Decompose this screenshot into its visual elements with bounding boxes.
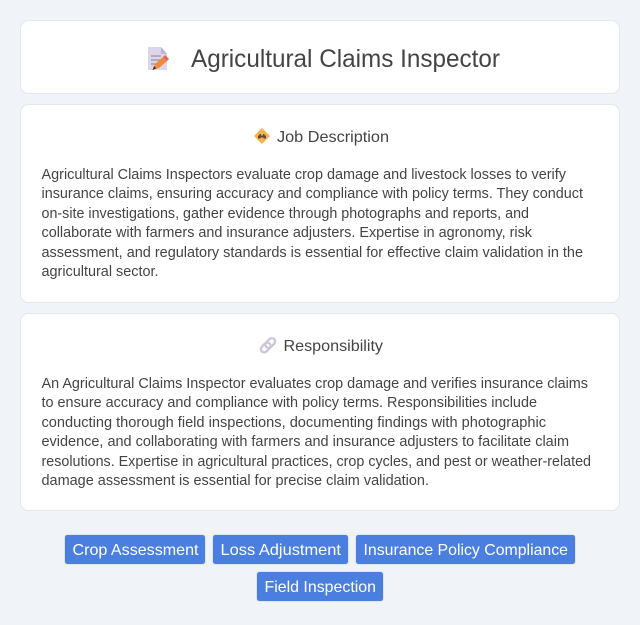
text block: responsibility: to ensure accuracy and compliance with policy terms. Responsibilities include	[42, 395, 537, 411]
tag: crop assessment: Crop Assessment	[72, 542, 199, 559]
text block: responsibility: damage assessment is essential for precise claim validation.	[42, 473, 429, 489]
panel: responsibility	[20, 314, 620, 510]
tag: field inspection	[256, 572, 384, 602]
text block: responsibility: conducting thorough field inspections, documenting findings with photographic	[42, 415, 546, 431]
panel: job description	[20, 104, 620, 302]
text block: job description: insurance claims, ensuring accuracy and compliance with policy terms. They conduct	[42, 186, 583, 202]
tag: insurance policy compliance	[356, 534, 576, 564]
tag: loss adjustment: Loss Adjustment	[220, 542, 342, 559]
tag: field inspection: Field Inspection	[264, 579, 376, 596]
text block: responsibility	[42, 376, 591, 489]
text block: job description: on-site investigations, gather evidence through photographs and reports, and	[42, 206, 529, 222]
text block: job description: collaborate with farmers and insurance adjusters. Expertise in agronomy, risk	[42, 225, 533, 241]
text block: responsibility: An Agricultural Claims Inspector evaluates crop damage and verifies insurance claims	[42, 376, 588, 392]
text block: job description: assessment, and regulatory standards is essential for effective claim validation in the	[42, 245, 583, 261]
icon: link	[260, 337, 276, 354]
text block: responsibility: resolutions. Expertise in agricultural practices, crop cycles, and pest or weather-related	[42, 454, 591, 470]
text block: job description	[42, 167, 583, 280]
icon: document with pencil	[148, 47, 169, 70]
title: Agricultural Claims Inspector	[191, 45, 500, 73]
text block: job description: Agricultural Claims Inspectors evaluate crop damage and livestock losses to verify	[42, 167, 567, 183]
heading: job description: Job Description	[277, 129, 389, 146]
tag: insurance policy compliance: Insurance Policy Compliance	[364, 542, 568, 559]
text block: job description: agricultural sector.	[42, 264, 158, 280]
tag: loss adjustment	[212, 534, 348, 564]
text block: responsibility: evidence, and collaborating with farmers and insurance adjusters to facilitate claim	[42, 434, 569, 450]
panel: title header	[20, 20, 620, 94]
tag: crop assessment	[64, 534, 206, 564]
heading: responsibility: Responsibility	[284, 338, 383, 355]
icon: diamond sign	[255, 129, 269, 143]
